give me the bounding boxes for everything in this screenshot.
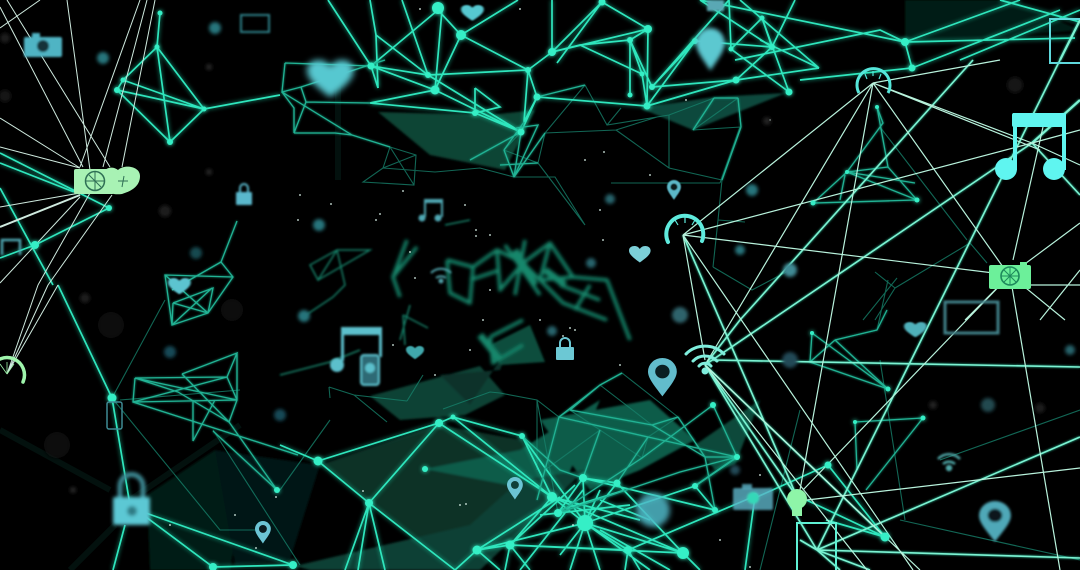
network: left cluster (0, 13, 293, 570)
tiny star particles (169, 8, 771, 568)
icon: pin upper centre (667, 180, 681, 200)
icon: green camera right (989, 262, 1031, 289)
icon: gauge centre (666, 216, 703, 242)
icon: green gauge left (0, 358, 24, 382)
icon: lock upper left (236, 184, 252, 205)
icon: camera bottom (733, 484, 773, 510)
icon: lock centre (556, 338, 574, 360)
icon: gauge top right (857, 69, 890, 93)
icon: heart centre (629, 246, 651, 262)
icon: wifi faint centre (431, 269, 451, 282)
network: top cluster (328, 0, 1080, 132)
network: white fan at far left (0, 0, 155, 374)
network: left meshes (133, 221, 298, 490)
icon: music note left edge (2, 240, 20, 255)
icon: monitor top right (1050, 19, 1080, 63)
icon: monitor bottom right (797, 523, 836, 570)
icon: music note mid (330, 327, 382, 372)
icon: pin centre large (648, 358, 677, 396)
icon: blurred pin bottom (636, 493, 670, 527)
icon: monitor top left (241, 15, 269, 32)
icon: heart small mid (406, 346, 424, 359)
icon: wifi right (938, 454, 960, 470)
icon: green camera and heart left (74, 167, 140, 194)
icon: green light bulb (787, 489, 807, 516)
icon: small camera top (707, 0, 724, 11)
central blurred mesh clump (393, 240, 630, 363)
small blurred mesh left of centre (280, 220, 470, 375)
icon: phone mid (361, 355, 379, 385)
network: mid cluster below top (282, 60, 923, 490)
icon: phone left (107, 402, 122, 429)
icon: heart top centre (461, 5, 484, 21)
icon: heart left cluster (168, 278, 191, 294)
icon: heart right (904, 322, 927, 337)
icon: pin bottom right (979, 501, 1011, 542)
icon: blurred monitor right (945, 302, 998, 333)
network: bottom mid mesh (522, 373, 737, 513)
icon: camera top-left (24, 33, 62, 57)
icon: music note centre (418, 199, 443, 222)
network: thin fans on right (683, 60, 1080, 570)
network: hub fans on right (683, 20, 1080, 570)
icon: wifi centre (686, 346, 724, 374)
icon: blurred pin top (696, 28, 725, 70)
icon: pin bottom centre (507, 477, 523, 499)
icon: blurred heart top (307, 60, 354, 97)
network: bottom cluster (280, 417, 885, 570)
icon: lock bottom-left blurred (113, 475, 150, 525)
icon: pin bottom left (255, 521, 271, 543)
icon: music note large (995, 113, 1066, 180)
